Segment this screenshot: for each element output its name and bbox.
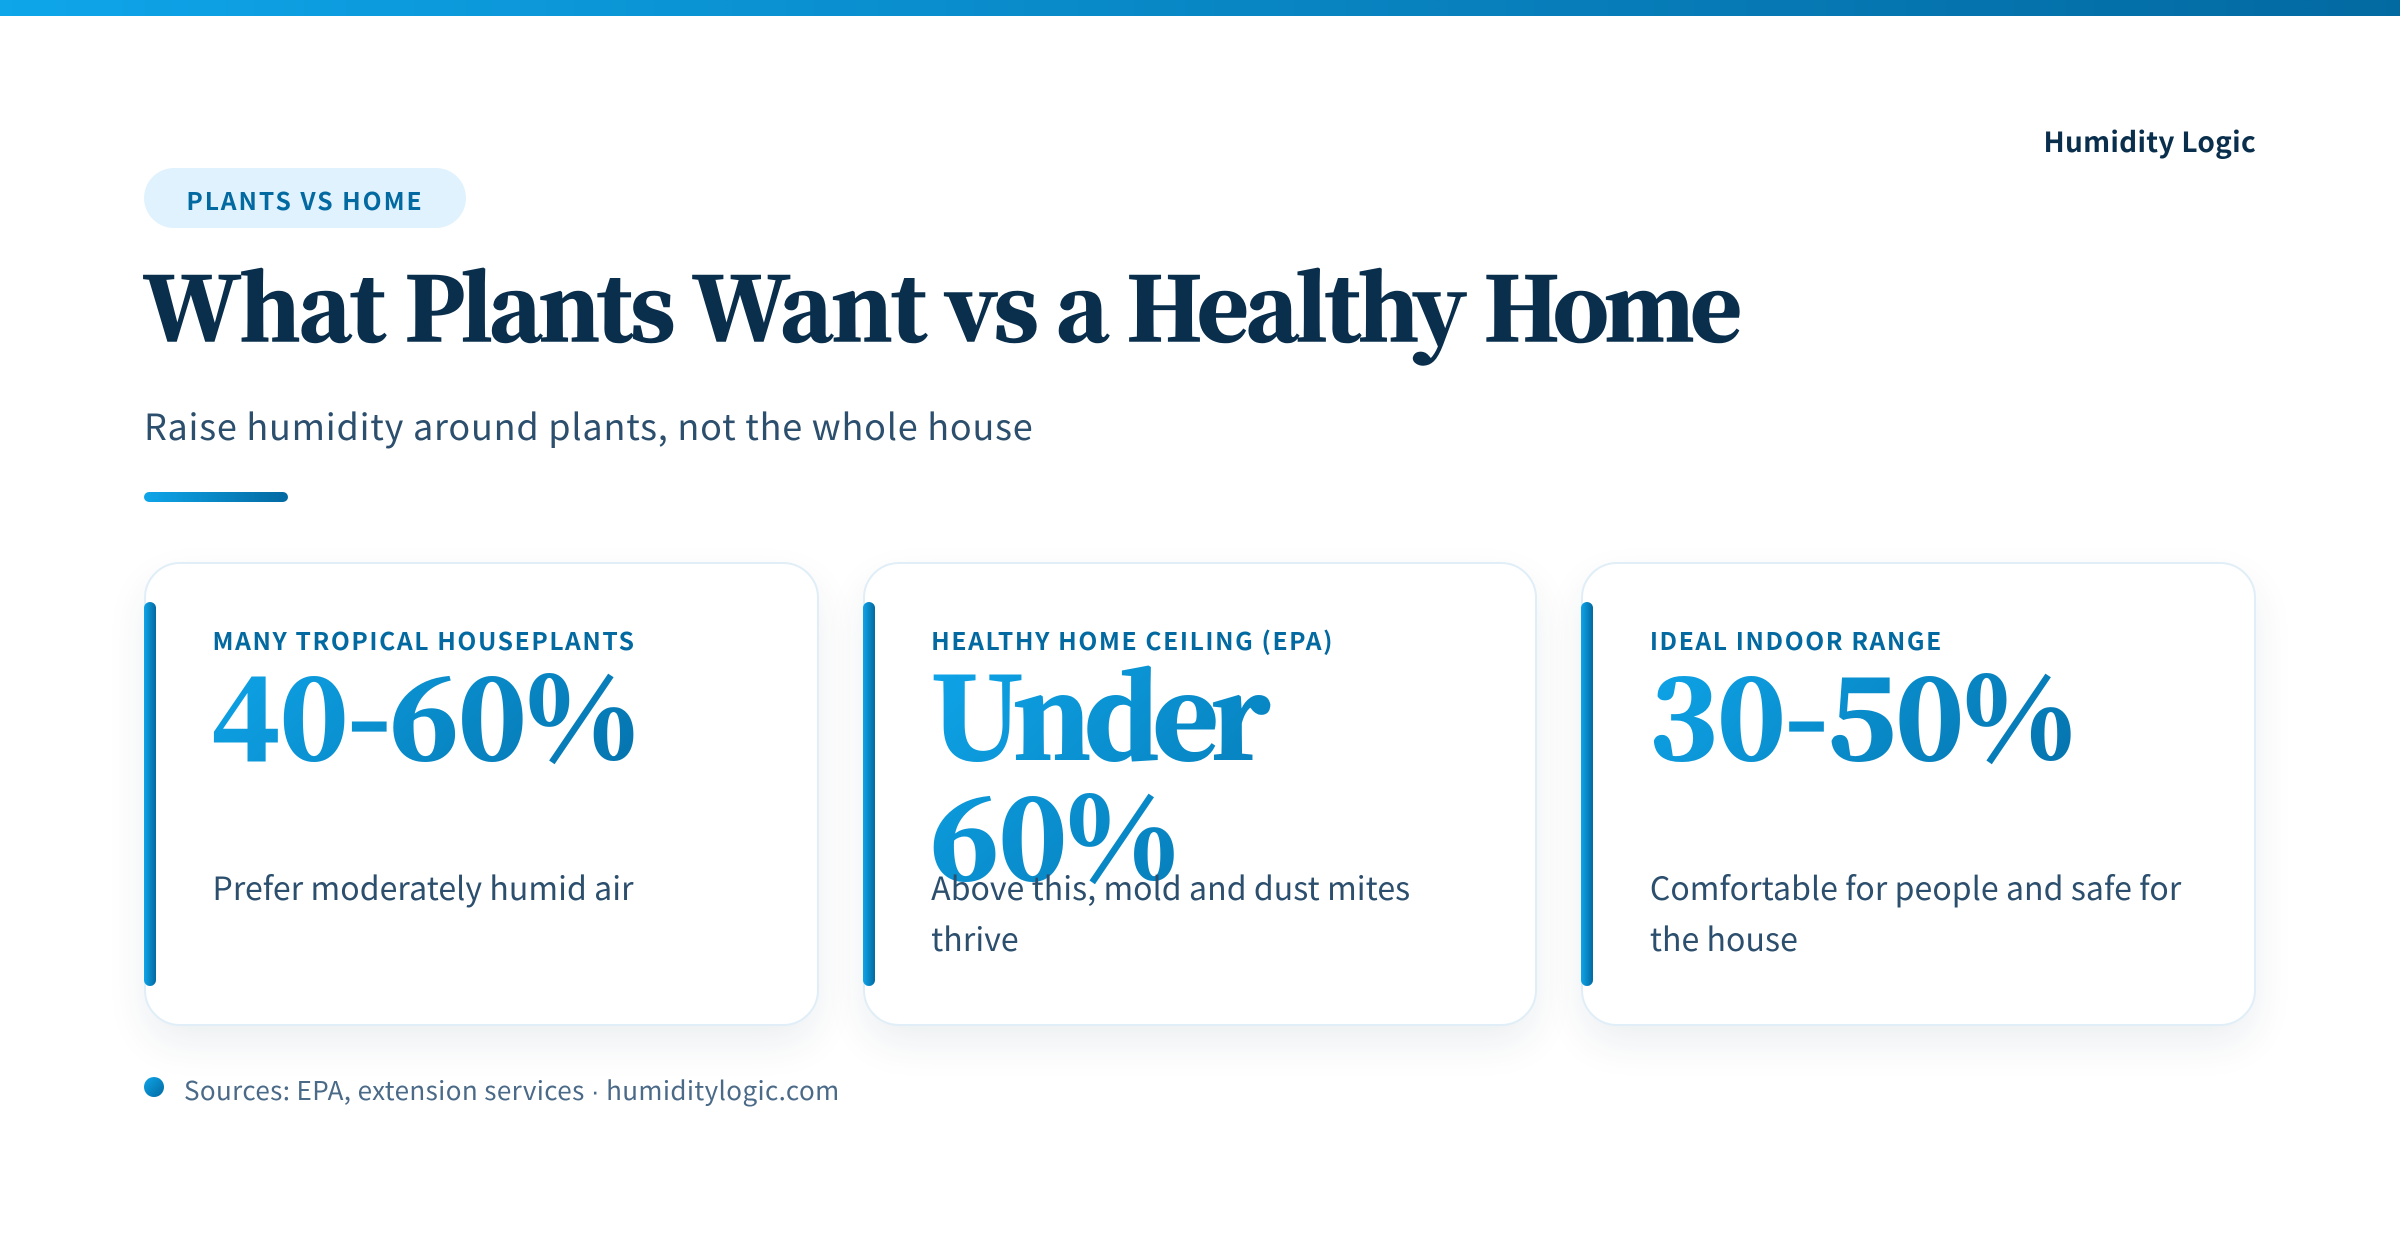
card accent bar bbox=[144, 602, 156, 986]
accent underline bbox=[144, 492, 288, 502]
title: What Plants Want vs a Healthy Home bbox=[143, 241, 1737, 367]
card label: MANY TROPICAL HOUSEPLANTS bbox=[212, 622, 636, 658]
panel: healthy home ceiling bbox=[863, 562, 1537, 1026]
big stat: 40-60%: 40-60% bbox=[212, 631, 636, 792]
big stat: 30-50%: 30-50% bbox=[1649, 631, 2074, 792]
panel: many tropical houseplants bbox=[144, 562, 819, 1026]
panel: ideal indoor range bbox=[1581, 562, 2256, 1026]
card description: the house bbox=[1650, 915, 1798, 961]
card description bbox=[931, 864, 1410, 961]
eyebrow pill: PLANTS VS HOME bbox=[186, 182, 424, 218]
card description bbox=[1650, 864, 2182, 961]
source line: Sources: EPA, extension services · humiditylogic.com bbox=[184, 1071, 840, 1108]
card description: Above this, mold and dust mites bbox=[931, 864, 1410, 910]
big stat: Under 60%: 60% bbox=[931, 751, 1177, 912]
brand name: Humidity Logic bbox=[2044, 120, 2256, 160]
source dot bbox=[144, 1077, 164, 1097]
eyebrow pill bbox=[144, 168, 466, 228]
card description: Comfortable for people and safe for bbox=[1650, 864, 2181, 910]
card accent bar bbox=[863, 602, 875, 986]
card description: Prefer moderately humid air bbox=[212, 864, 634, 910]
card label: HEALTHY HOME CEILING (EPA) bbox=[931, 622, 1334, 658]
big stat: 30-50% bbox=[1649, 652, 2184, 772]
big stat: 40-60% bbox=[212, 652, 747, 772]
card description: thrive bbox=[931, 915, 1019, 961]
card label: IDEAL INDOOR RANGE bbox=[1650, 622, 1943, 658]
card accent bar bbox=[1581, 602, 1593, 986]
subtitle: Raise humidity around plants, not the whole house bbox=[144, 398, 1033, 450]
big stat: Under 60% bbox=[931, 652, 1465, 892]
top gradient bar bbox=[0, 0, 2400, 16]
